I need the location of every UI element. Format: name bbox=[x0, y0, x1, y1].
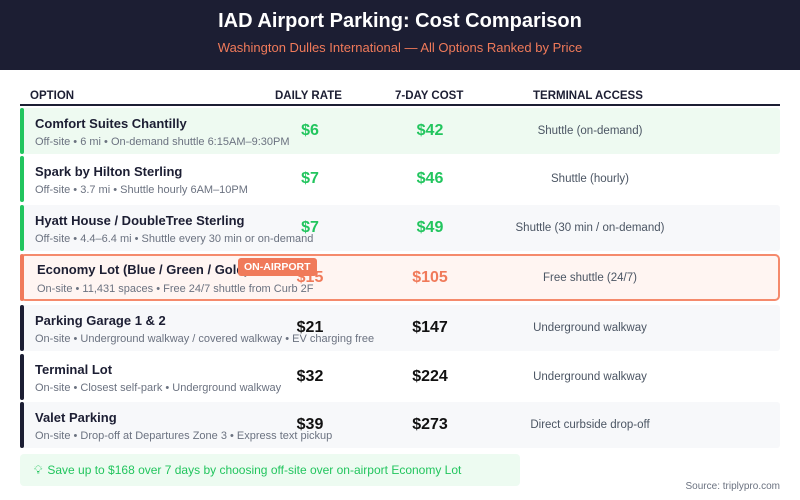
row: Terminal Lot: $32 bbox=[297, 368, 323, 385]
row: Spark by Hilton: $7 bbox=[301, 170, 319, 187]
row: Economy Lot (highlighted): $105 bbox=[412, 269, 448, 286]
row: Comfort Suites bbox=[20, 108, 780, 154]
column header: option: OPTION bbox=[30, 90, 74, 102]
tip callout: Save up to $168 over 7 days by choosing off-site over on-airport Economy Lot bbox=[47, 463, 461, 477]
row: Comfort Suites: $6 bbox=[301, 122, 319, 139]
row: Valet Parking: On-site • Drop-off at Departures Zone 3 • Express text pickup bbox=[35, 430, 332, 442]
row: Hyatt House: Off-site • 4.4–6.4 mi • Shuttle every 30 min or on-demand bbox=[35, 233, 313, 245]
row: Spark by Hilton: Shuttle (hourly) bbox=[551, 173, 629, 185]
row: Parking Garage bbox=[20, 305, 780, 351]
row: Terminal Lot bbox=[20, 354, 780, 400]
row: Parking Garage: Parking Garage 1 & 2 bbox=[35, 313, 166, 328]
row: Valet Parking: Direct curbside drop-off bbox=[530, 419, 650, 431]
badge: on-airport bbox=[238, 258, 316, 276]
row: Comfort Suites: Shuttle (on-demand) bbox=[538, 125, 642, 137]
row: Economy Lot (highlighted): Free shuttle (24/7) bbox=[543, 272, 637, 284]
row: Terminal Lot: Terminal Lot bbox=[35, 362, 112, 377]
row: Spark by Hilton: Spark by Hilton Sterling bbox=[35, 164, 182, 179]
row: Comfort Suites: $42 bbox=[417, 122, 443, 139]
row: Economy Lot (highlighted): $15 bbox=[297, 269, 323, 286]
row: Parking Garage: $21 bbox=[297, 319, 323, 336]
row: Comfort Suites: Off-site • 6 mi • On-demand shuttle 6:15AM–9:30PM bbox=[35, 136, 290, 148]
row: Valet Parking bbox=[20, 402, 780, 448]
row: Terminal Lot: $224 bbox=[412, 368, 448, 385]
row: Terminal Lot: Underground walkway bbox=[533, 371, 647, 383]
row: Valet Parking: $39 bbox=[297, 416, 323, 433]
icon: lightbulb: 💡︎ bbox=[34, 463, 42, 477]
row: Economy Lot (highlighted): Economy Lot (Blue / Green / Gold) bbox=[37, 262, 249, 277]
row: Economy Lot (highlighted) bbox=[20, 254, 780, 301]
tip callout bbox=[20, 454, 520, 486]
header bbox=[0, 0, 800, 70]
column header: 7-day cost: 7-DAY COST bbox=[395, 90, 463, 102]
source: Source: triplypro.com bbox=[686, 481, 780, 492]
row: Economy Lot (highlighted): On-site • 11,431 spaces • Free 24/7 shuttle from Curb 2F bbox=[37, 283, 314, 295]
subtitle: Washington Dulles International — All Options Ranked by Price bbox=[218, 40, 582, 55]
row: Hyatt House bbox=[20, 205, 780, 251]
column header: daily rate: DAILY RATE bbox=[275, 90, 342, 102]
row: Spark by Hilton: Off-site • 3.7 mi • Shuttle hourly 6AM–10PM bbox=[35, 184, 248, 196]
row: Hyatt House: Shuttle (30 min / on-demand) bbox=[516, 222, 664, 234]
row: Comfort Suites: Comfort Suites Chantilly bbox=[35, 116, 187, 131]
row: Spark by Hilton bbox=[20, 156, 780, 202]
row: Valet Parking: Valet Parking bbox=[35, 410, 117, 425]
row: Hyatt House: $49 bbox=[417, 219, 443, 236]
badge: on-airport: ON-AIRPORT bbox=[244, 261, 310, 273]
row: Parking Garage: $147 bbox=[412, 319, 448, 336]
title: IAD Airport Parking: Cost Comparison bbox=[218, 10, 582, 32]
row: Terminal Lot: On-site • Closest self-park • Underground walkway bbox=[35, 382, 281, 394]
row: Parking Garage: On-site • Underground walkway / covered walkway • EV charging free bbox=[35, 333, 374, 345]
column header: terminal access: TERMINAL ACCESS bbox=[533, 90, 643, 102]
row: Valet Parking: $273 bbox=[412, 416, 448, 433]
row: Hyatt House: $7 bbox=[301, 219, 319, 236]
row: Parking Garage: Underground walkway bbox=[533, 322, 647, 334]
row: Spark by Hilton: $46 bbox=[417, 170, 443, 187]
row: Hyatt House: Hyatt House / DoubleTree Sterling bbox=[35, 213, 244, 228]
